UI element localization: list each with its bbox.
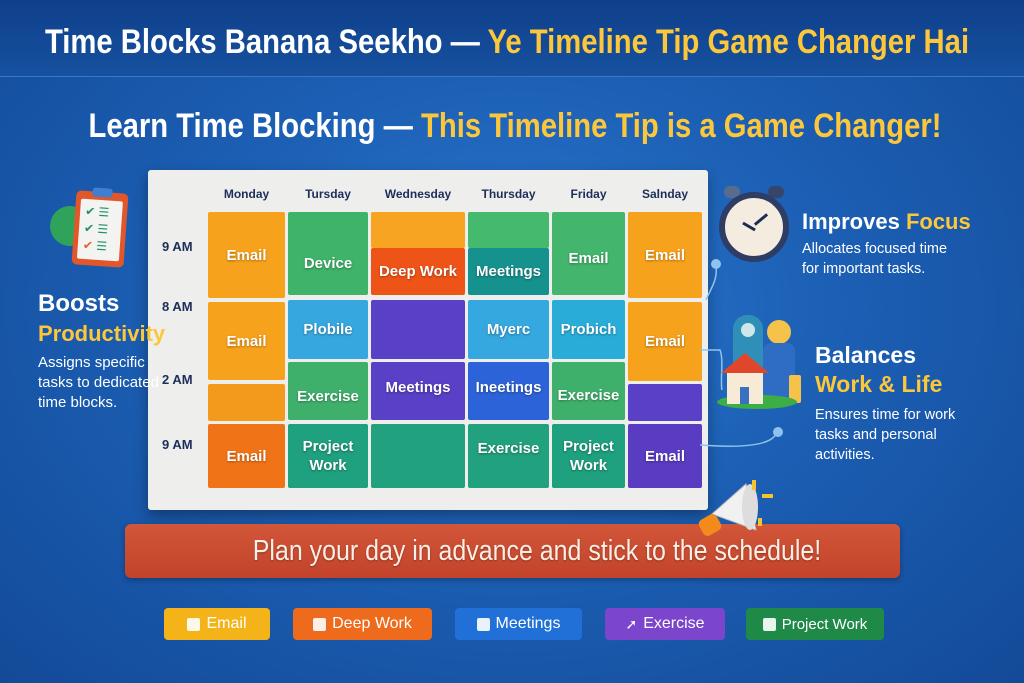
text: improves focus: for important tasks. xyxy=(802,261,925,277)
text: Project xyxy=(303,438,353,455)
text: boosts productivity: Productivity xyxy=(38,321,165,346)
day headers: Thursday xyxy=(481,187,536,201)
text: Exercise xyxy=(643,615,705,632)
text: ➚ xyxy=(625,616,637,632)
icon: people and house xyxy=(717,315,801,409)
text: Work xyxy=(570,457,607,474)
day headers xyxy=(224,187,688,201)
text: Deep Work xyxy=(332,615,412,632)
text: balances work & life: Work & Life xyxy=(815,371,942,397)
text: Meetings xyxy=(496,615,560,632)
text: 9 AM xyxy=(162,437,193,452)
text: Email xyxy=(568,250,609,267)
time labels xyxy=(162,239,193,452)
icon: clipboard: ✔ ☰ xyxy=(85,204,110,220)
text: Meetings xyxy=(476,263,541,280)
text: balances work & life: Ensures time for work xyxy=(815,407,955,423)
icon: megaphone xyxy=(698,480,773,536)
text: 9 AM xyxy=(162,239,193,254)
icon: clipboard: ✔ ☰ xyxy=(84,221,109,237)
text: boosts productivity: Assigns specific tasks to dedicated time blocks. xyxy=(38,354,159,411)
connector lines xyxy=(700,259,783,447)
text: Email xyxy=(226,246,267,264)
text: Ineetings xyxy=(476,378,541,396)
legend xyxy=(164,608,884,640)
calendar board xyxy=(148,170,708,510)
callout banner: Plan your day in advance and stick to the schedule! xyxy=(253,535,821,567)
text: Email xyxy=(226,448,267,464)
text: Email xyxy=(226,332,267,350)
schedule cells xyxy=(208,212,702,488)
text: Myerc xyxy=(487,321,530,338)
text: improves focus: Improves Focus xyxy=(802,209,971,234)
text: Exercise xyxy=(297,388,359,404)
text: Email xyxy=(645,246,685,264)
text: boosts productivity xyxy=(38,290,165,411)
day headers: Salnday xyxy=(642,187,688,201)
text: Meetings xyxy=(385,378,450,396)
text: Email xyxy=(206,615,246,632)
text: Email xyxy=(645,448,685,464)
text: Probich xyxy=(561,321,616,338)
text: boosts productivity: Boosts xyxy=(38,290,119,317)
text: Work xyxy=(309,457,347,474)
title: Time Blocks Banana Seekho — Ye Timeline Tip Game Changer Hai xyxy=(45,23,969,61)
text: Plobile xyxy=(303,321,353,338)
day headers: Wednesday xyxy=(385,187,451,201)
text: improves focus: Allocates focused time xyxy=(802,241,947,257)
day headers: Monday xyxy=(224,187,269,201)
icon: clock xyxy=(719,186,789,262)
text: 2 AM xyxy=(162,372,193,387)
text: balances work & life xyxy=(815,342,956,463)
subtitle: Learn Time Blocking — This Timeline Tip is a Game Changer! xyxy=(88,107,942,145)
text: Exercise xyxy=(558,386,619,404)
text: Project xyxy=(563,438,614,455)
text: Exercise xyxy=(478,440,539,456)
text: 8 AM xyxy=(162,299,193,314)
icon: clipboard: ✔ ☰ xyxy=(82,238,107,254)
icon: clipboard xyxy=(50,188,128,268)
text: Project Work xyxy=(782,616,867,632)
text: balances work & life: activities. xyxy=(815,447,875,463)
text: improves focus xyxy=(802,209,971,277)
text: Email xyxy=(645,333,685,350)
text: Device xyxy=(304,255,352,272)
day headers: Tursday xyxy=(305,187,351,201)
text: balances work & life: Balances xyxy=(815,342,916,368)
day headers: Friday xyxy=(570,187,606,201)
text: balances work & life: tasks and personal xyxy=(815,427,937,443)
callout banner xyxy=(125,524,900,578)
text: Deep Work xyxy=(379,263,457,280)
header band xyxy=(0,0,1024,77)
